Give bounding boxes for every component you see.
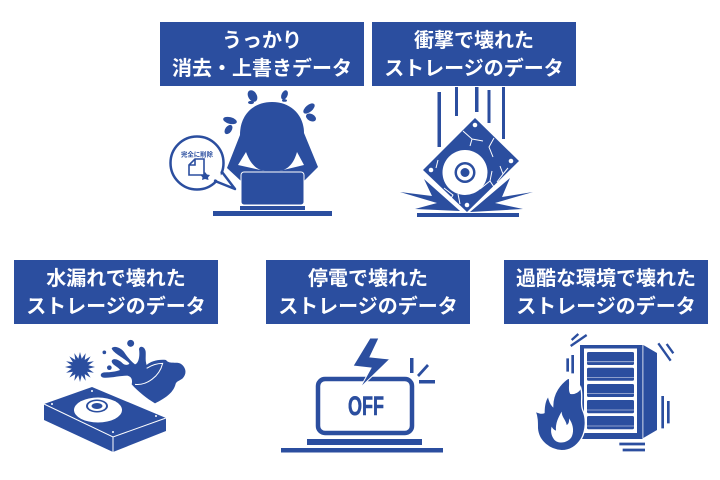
- icon: distressed person at laptop: [170, 88, 332, 216]
- icon: falling cracked hard disk: [400, 87, 533, 217]
- heading: harsh environment damaged data: 過酷な環境で壊れた: [516, 267, 696, 290]
- cracks: [436, 131, 508, 204]
- base bar: [417, 213, 519, 217]
- heading: accidentally erased data: 消去・上書きデータ: [172, 56, 352, 80]
- spark burst: [65, 352, 95, 382]
- flame: [535, 377, 585, 451]
- splash and cup: [101, 340, 185, 403]
- heading: water damaged data: 水漏れで壊れた: [46, 267, 186, 290]
- vibration lines: [568, 334, 673, 450]
- spark rays: [410, 358, 414, 373]
- heading: harsh environment damaged data: [504, 260, 708, 324]
- heading: shock damaged data: 衝撃で壊れた: [414, 29, 534, 52]
- impact burst: [400, 179, 460, 211]
- stand: [307, 439, 422, 445]
- speech bubble with document: [170, 136, 235, 190]
- icon: server cabinet on fire: [535, 334, 673, 451]
- icon: water splash on hard disk: [44, 340, 185, 452]
- heading: power outage damaged data: [266, 260, 470, 324]
- heading: shock damaged data: ストレージのデータ: [384, 56, 564, 80]
- desk: [213, 211, 332, 216]
- heading: power outage damaged data: 停電で壊れた: [308, 267, 428, 290]
- icon: power off monitor: [281, 338, 443, 452]
- heading: power outage damaged data: ストレージのデータ: [278, 294, 458, 318]
- head and arms: [227, 102, 318, 181]
- speech bubble with document: 完全に削除: [181, 150, 214, 158]
- monitor: [318, 379, 412, 433]
- heading: accidentally erased data: [160, 22, 364, 86]
- desk: [281, 448, 443, 452]
- lightning bolt: [353, 338, 390, 388]
- heading: shock damaged data: [372, 22, 576, 86]
- inner flame: [551, 412, 573, 443]
- cabinet: [580, 345, 642, 439]
- sweat drops: [222, 88, 317, 136]
- drive bays: [587, 352, 634, 429]
- heading: accidentally erased data: うっかり: [222, 29, 302, 52]
- heading: harsh environment damaged data: ストレージのデータ: [516, 294, 696, 318]
- hard disk body: [44, 387, 166, 452]
- hard disk: [423, 118, 519, 212]
- gaps between head and arms: [238, 152, 304, 171]
- heading: water damaged data: ストレージのデータ: [26, 294, 206, 318]
- motion lines: [438, 87, 505, 147]
- laptop: [241, 172, 304, 205]
- OFF label: OFF: [348, 391, 384, 421]
- heading: water damaged data: [14, 260, 218, 324]
